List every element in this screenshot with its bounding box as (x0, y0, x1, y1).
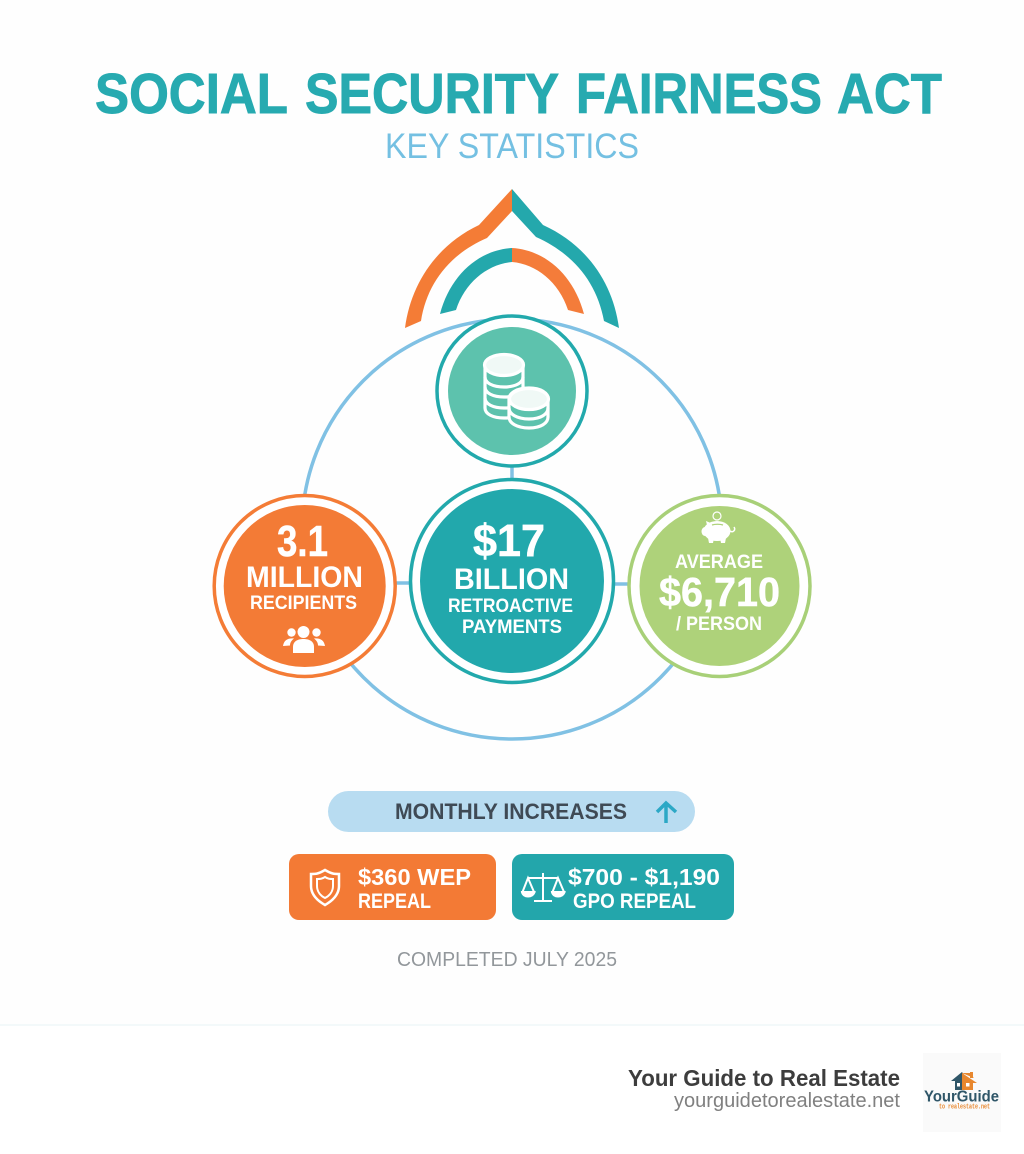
logo wordmark: YourGuide (924, 1088, 999, 1106)
icon: coin stacks (484, 354, 548, 428)
icon: up arrow (657, 803, 676, 823)
panel: GPO repeal (512, 854, 734, 920)
icon: piggy bank (702, 512, 735, 543)
title: ACT (837, 62, 942, 126)
panel: WEP repeal (289, 854, 496, 920)
label: per person: / PERSON (676, 614, 762, 635)
label: million: MILLION (246, 561, 363, 594)
title: SOCIAL (95, 62, 288, 126)
panel: monthly increases pill (328, 791, 695, 832)
stat: $17: $17 (473, 515, 545, 566)
large connecting circle (302, 319, 722, 739)
label: GPO repeal: GPO REPEAL (573, 890, 696, 913)
completion date: COMPLETED JULY 2025 (397, 948, 617, 971)
icon: people (283, 626, 325, 653)
stat: $360 WEP: $360 WEP (358, 864, 471, 890)
label: repeal: REPEAL (358, 890, 431, 913)
panel: 3.1 million recipients (214, 496, 395, 676)
title: FAIRNESS (576, 62, 822, 126)
panel: average per person (629, 496, 810, 676)
footer brand name: Your Guide to Real Estate (628, 1065, 900, 1091)
logo tagline: to realestate.net (939, 1104, 990, 1112)
footer website: yourguidetorealestate.net (674, 1090, 900, 1112)
label: recipients: RECIPIENTS (250, 593, 357, 614)
stat: $700 - $1,190: $700 - $1,190 (568, 864, 720, 890)
connector lines (394, 464, 629, 584)
heading: monthly increases: MONTHLY INCREASES (395, 799, 627, 824)
title: SECURITY (305, 62, 559, 126)
label: payments: PAYMENTS (462, 616, 562, 638)
icon: house (951, 1072, 977, 1090)
stat: $6,710: $6,710 (659, 569, 780, 615)
label: retroactive: RETROACTIVE (448, 595, 573, 617)
label: billion: BILLION (454, 563, 569, 596)
logo (923, 1053, 1001, 1132)
stat: 3.1: 3.1 (277, 517, 328, 566)
icon: shield (311, 870, 339, 905)
title (95, 62, 942, 126)
arch emblem (405, 189, 619, 328)
subtitle: KEY STATISTICS (385, 127, 639, 166)
label: average: AVERAGE (675, 551, 763, 573)
panel: coins circle (437, 316, 587, 466)
panel: $17 billion retroactive payments (410, 480, 614, 682)
icon: balance scales (522, 873, 564, 901)
